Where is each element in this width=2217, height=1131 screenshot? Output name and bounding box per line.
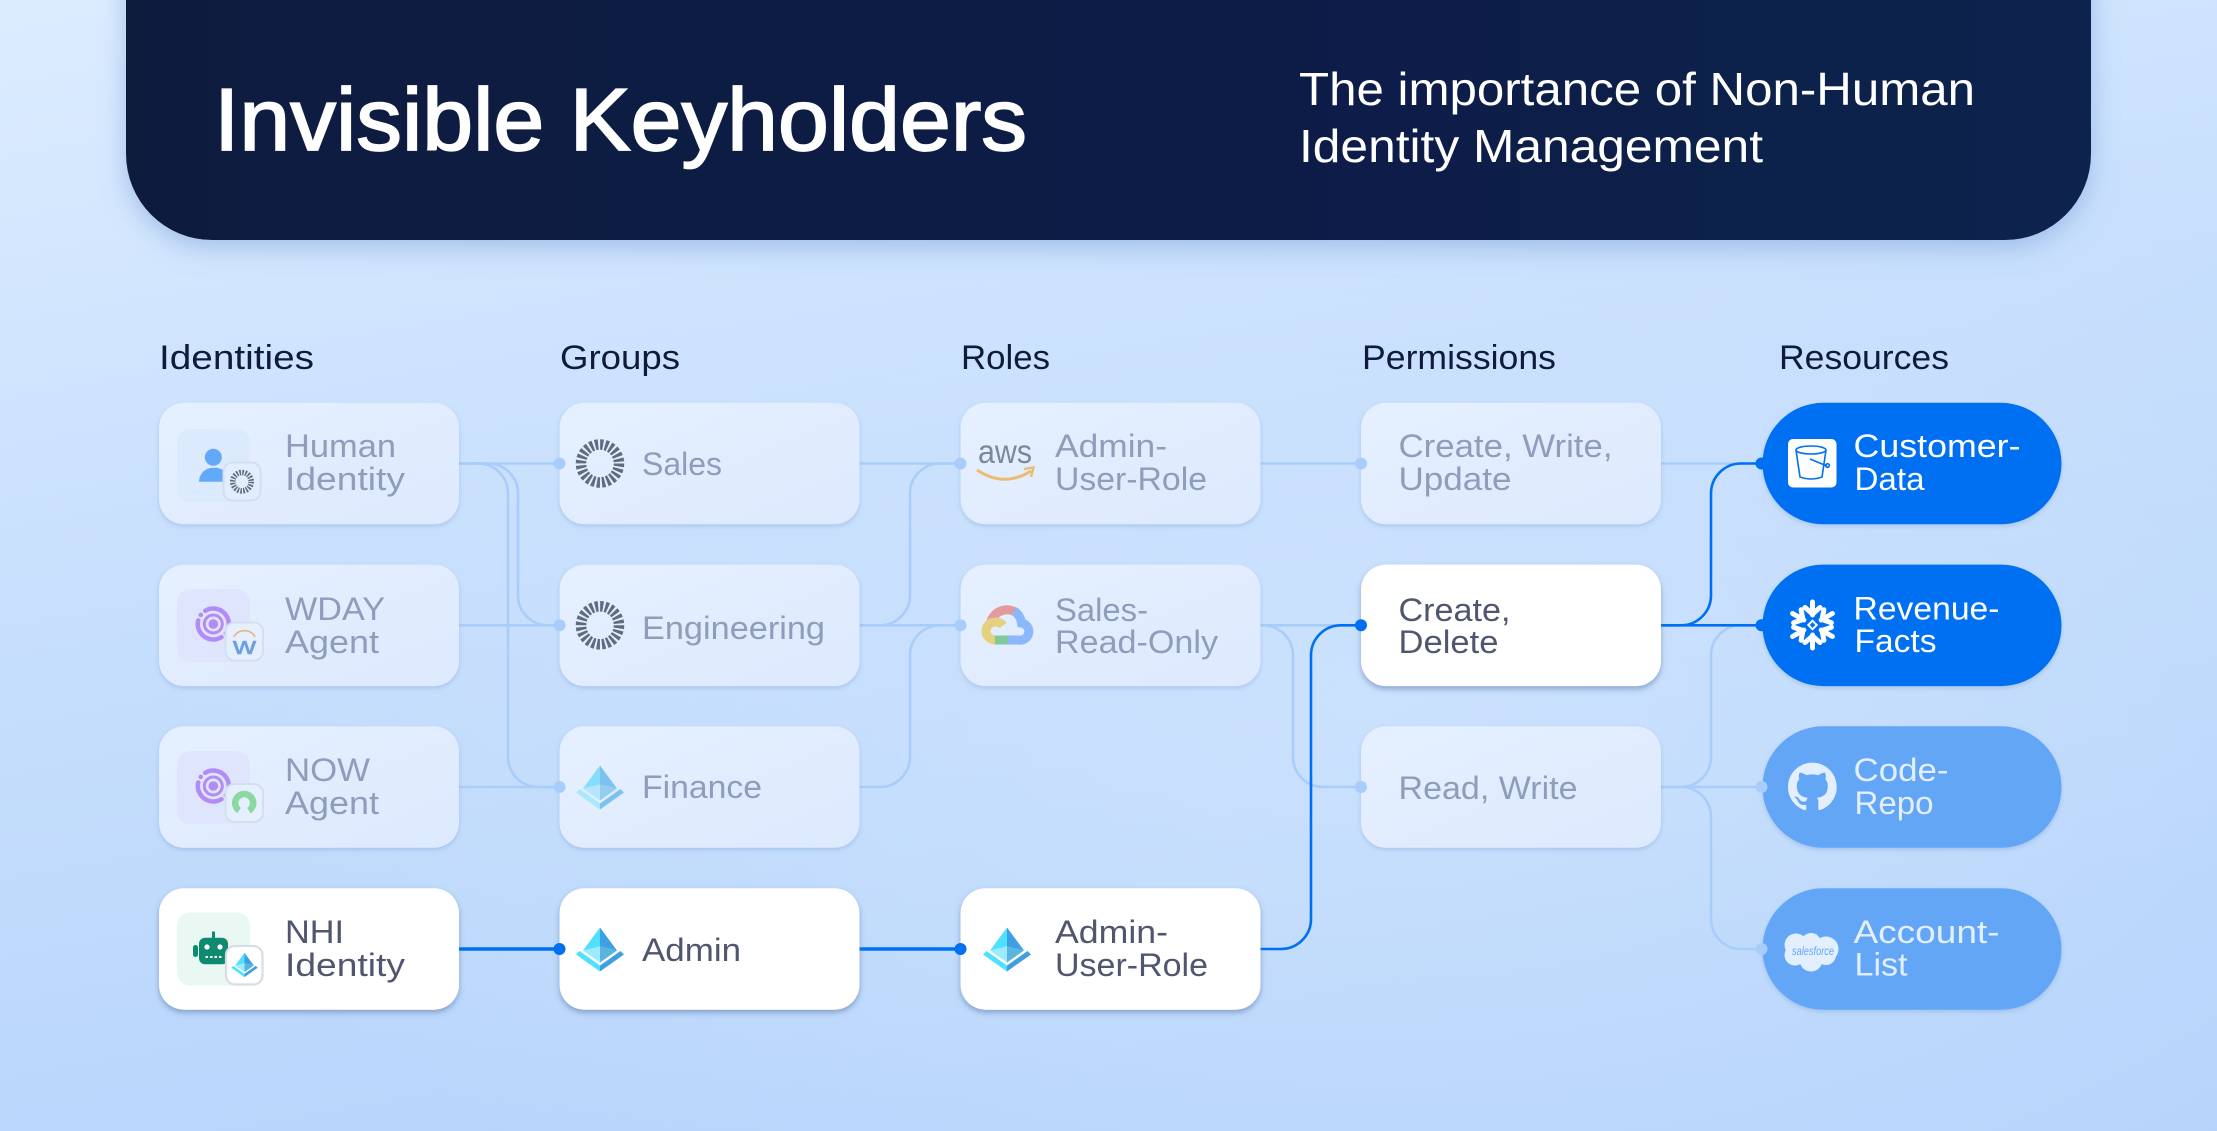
panel: Read, Write permission card: Read, Write: [1398, 770, 1578, 806]
panel: NHI Identity card: [159, 888, 459, 1010]
icon: aws logo: aws: [978, 433, 1032, 470]
panel: Human Identity card: [159, 403, 459, 524]
column headings: Groups: [560, 339, 680, 377]
panel: Create, Delete permission card: Delete: [1398, 624, 1498, 660]
icon: google cloud logo: [986, 610, 1029, 640]
panel: Azure Admin-User-Role card: Admin-: [1055, 914, 1168, 950]
panel: Finance group card: Finance: [642, 769, 762, 805]
panel: NHI Identity card: Identity: [285, 947, 405, 983]
panel: AWS Admin-User-Role card: [960, 403, 1260, 524]
panel: Revenue-Facts resource pill: [1762, 565, 2062, 686]
panel: Human Identity card: Identity: [285, 461, 405, 497]
icon: salesforce cloud: [1784, 933, 1838, 972]
panel: Admin group card: [560, 888, 860, 1010]
panel: Sales group card: [560, 403, 860, 524]
title: Invisible Keyholders: [214, 70, 1027, 169]
panel: AWS Admin-User-Role card: Admin-: [1055, 428, 1167, 464]
panel: Account-List resource pill: List: [1854, 946, 1908, 982]
icon: salesforce cloud: salesforce: [1792, 944, 1834, 958]
panel: NHI Identity card: NHI: [285, 914, 344, 950]
panel: Revenue-Facts resource pill: Facts: [1854, 623, 1936, 659]
icon: snowflake: [1789, 602, 1836, 648]
panel: Read, Write permission card: [1361, 726, 1661, 848]
icon: okta sunburst: [581, 606, 619, 644]
panel: Create, Write, Update permission card: Create, Write,: [1398, 428, 1612, 464]
icon: github: [1788, 763, 1837, 810]
panel: Admin group card: Admin: [642, 932, 741, 968]
connector endpoint dots: [554, 458, 1768, 955]
column headings: [159, 339, 1949, 377]
panel: Engineering group card: [560, 565, 860, 686]
icon: azure diamond: [983, 928, 1031, 972]
panel: Azure Admin-User-Role card: [960, 888, 1260, 1010]
panel: Create, Write, Update permission card: Update: [1398, 461, 1512, 497]
connectors: highlighted attack path: [459, 464, 1762, 949]
panel: Customer-Data resource pill: Customer-: [1854, 428, 2020, 464]
panel: Account-List resource pill: [1762, 888, 2062, 1010]
icon: storage bucket: [1788, 439, 1836, 488]
panel: Google Sales-Read-Only card: Sales-: [1055, 592, 1148, 628]
panel: Create, Delete permission card: Create,: [1398, 592, 1510, 628]
panel: Sales group card: Sales: [642, 446, 722, 482]
panel: WDAY Agent card: [159, 565, 459, 686]
panel: Create, Write, Update permission card: [1361, 403, 1661, 524]
subtitle: Identity Management: [1299, 120, 1763, 172]
panel: NOW Agent card: [159, 726, 459, 848]
subtitle: [1299, 63, 1975, 172]
icon: person with okta badge: [177, 429, 260, 502]
panel: Revenue-Facts resource pill: Revenue-: [1854, 590, 2000, 626]
panel: Code-Repo resource pill: [1762, 726, 2062, 848]
panel: NOW Agent card: NOW: [285, 752, 371, 788]
column headings: Permissions: [1362, 339, 1556, 377]
panel: Customer-Data resource pill: Data: [1854, 461, 1925, 497]
icon: azure diamond: [576, 928, 624, 972]
panel: Azure Admin-User-Role card: User-Role: [1055, 947, 1208, 983]
panel: Finance group card: [560, 726, 860, 848]
panel: WDAY Agent card: Agent: [285, 624, 379, 660]
icon: azure diamond: [576, 766, 624, 810]
panel: Engineering group card: Engineering: [642, 610, 825, 646]
header banner: [126, 0, 2091, 240]
icon: agent with workday badge: [177, 589, 263, 662]
icon: agent with workday badge: w: [232, 633, 257, 660]
panel: AWS Admin-User-Role card: User-Role: [1055, 461, 1207, 497]
panel: Create, Delete permission card: [1361, 565, 1661, 686]
column headings: Roles: [961, 339, 1050, 377]
panel: Customer-Data resource pill: [1762, 403, 2062, 524]
panel: Google Sales-Read-Only card: [960, 565, 1260, 686]
panel: Account-List resource pill: Account-: [1854, 914, 2000, 950]
panel: NOW Agent card: Agent: [285, 785, 379, 821]
panel: Google Sales-Read-Only card: Read-Only: [1055, 624, 1218, 660]
panel: Code-Repo resource pill: Code-: [1854, 752, 1948, 788]
icon: okta sunburst: [581, 444, 619, 482]
subtitle: The importance of Non-Human: [1299, 63, 1975, 115]
icon: agent with servicenow badge: [177, 751, 263, 824]
connectors: inactive paths: [459, 464, 1762, 949]
panel: Human Identity card: Human: [285, 428, 396, 464]
panel: Code-Repo resource pill: Repo: [1854, 785, 1934, 821]
panel: WDAY Agent card: WDAY: [285, 591, 385, 627]
column headings: Identities: [159, 339, 314, 377]
icon: robot with azure badge: [177, 912, 262, 986]
column headings: Resources: [1779, 339, 1949, 377]
